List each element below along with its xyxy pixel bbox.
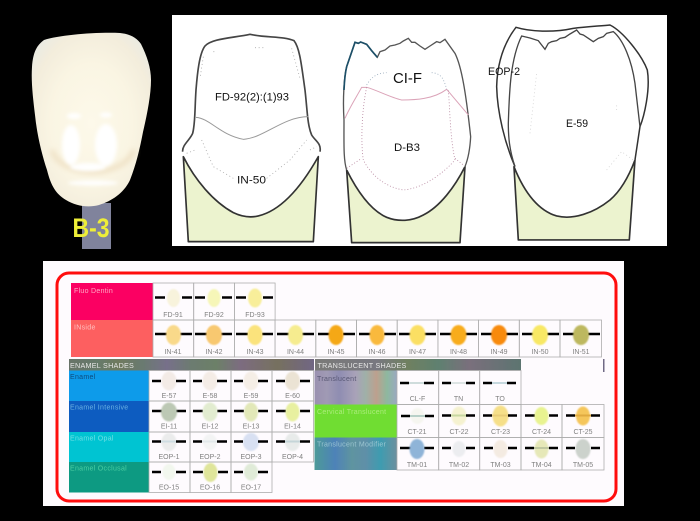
heading: Fluo Dentin [71,283,153,320]
swatch: CT-22 [439,404,480,438]
swatch: EO-16: EO-16 [200,484,220,492]
swatch: TM-05: TM-05 [573,462,593,469]
swatch: TM-01 [397,438,439,470]
label: EOP-2: EOP-2 [488,66,520,78]
swatch: EI-11 [149,401,190,432]
swatch: TN: TN [454,396,463,403]
crown shading band [52,150,134,172]
swatch: E-57: E-57 [162,393,176,400]
row: Fluo Dentin [71,283,275,320]
label: E-59: E-59 [566,118,588,130]
swatch: FD-91 [153,283,194,320]
crown body [32,33,151,206]
swatch: TM-03 [480,438,521,470]
heading: Enamel Opal: Enamel Opal [70,436,114,442]
heading: Enamel Occlusal [69,462,149,492]
swatch: EI-13: EI-13 [243,424,259,430]
swatch: CT-25: CT-25 [573,429,593,436]
label: B-3: B-3 [72,213,110,243]
swatch: IN-43: IN-43 [246,349,264,356]
swatch: E-58: E-58 [203,393,217,400]
swatch: IN-45 [316,320,356,357]
swatch: EI-12 [190,401,231,432]
swatch: TM-03: TM-03 [490,462,511,469]
heading: Cervical Translucent: Cervical Translucent [317,409,386,416]
row: Enamel Occlusal [69,462,272,492]
swatch: EO-15: EO-15 [159,484,179,492]
swatch: IN-41 [153,320,194,357]
swatch: EO-17 [231,462,272,492]
swatch: EOP-2 [190,432,231,462]
swatch: EOP-1 [149,432,190,462]
swatch: IN-51 [560,320,602,357]
heading: Enamel Intensive [69,401,149,432]
swatch: IN-47 [397,320,438,357]
heading: Translucent [314,370,397,404]
swatch: CT-21 [397,404,439,438]
swatch: EOP-3 [231,432,272,462]
heading: Translucent Modifier: Translucent Modifier [317,442,387,448]
swatch: IN-50 [519,320,560,357]
swatch: IN-44 [275,320,316,357]
heading: Translucent Shades: TRANSLUCENT SHADES [318,361,407,370]
swatch: IN-49 [479,320,519,357]
label: D-B3: D-B3 [394,142,420,154]
swatch: FD-92: FD-92 [204,312,224,319]
heading: Enamel Opal [69,432,149,462]
heading: Enamel: Enamel [70,374,96,381]
heading: INside: INside [74,324,96,332]
swatch: FD-91: FD-91 [163,312,183,319]
swatch: E-58 [190,370,231,401]
swatch: E-57 [149,370,190,401]
row: Translucent Modifier [314,438,604,470]
heading: Translucent Shades [315,359,521,370]
swatch: IN-47: IN-47 [409,349,426,356]
diagram: tooth 1 [183,34,320,242]
heading: Enamel [69,370,149,401]
swatch: EO-16 [190,462,231,492]
swatch: EOP-3: EOP-3 [240,454,262,461]
swatch: IN-42 [194,320,234,357]
diagram: tooth 3 [488,25,648,240]
panel: layering diagrams [172,15,667,246]
swatch: E-60 [272,370,314,401]
swatch: IN-41: IN-41 [164,349,182,356]
swatch: CT-24 [521,404,562,438]
swatch: TM-04: TM-04 [531,462,552,469]
swatch: EI-12: EI-12 [202,424,218,430]
swatch: EOP-1: EOP-1 [158,454,180,461]
swatch: FD-93: FD-93 [245,312,265,319]
swatch: IN-42: IN-42 [205,349,223,356]
icon: tooth stem [82,203,111,249]
swatch: CT-25 [562,404,604,438]
heading: INside [71,320,153,357]
swatch: FD-93 [234,283,275,320]
heading: Enamel Shades [69,359,314,370]
swatch: IN-46 [356,320,397,357]
swatch: TN [439,370,480,404]
swatch: IN-43 [234,320,275,357]
row: Enamel Opal [69,432,314,462]
panel: shade chart [43,261,624,506]
tooth photo: B-3 crown [32,33,151,249]
swatch: IN-51: IN-51 [572,349,590,356]
swatch: EOP-4: EOP-4 [282,454,303,461]
diagram: tooth 2 [343,38,471,243]
swatch: CL-F [397,370,439,404]
heading: Enamel Occlusal: Enamel Occlusal [70,466,127,472]
swatch: IN-48: IN-48 [450,349,467,356]
swatch: TM-02: TM-02 [449,462,469,469]
swatch: IN-50: IN-50 [531,349,549,356]
swatch: TM-04 [521,438,562,470]
swatch: TM-05 [562,438,604,470]
swatch: TM-02 [439,438,480,470]
red rounded border [57,273,616,501]
swatch: EO-17: EO-17 [241,484,261,492]
swatch: EO-15 [149,462,190,492]
swatch: EOP-4 [272,432,314,462]
row: Translucent [314,370,521,404]
swatch: CT-24: CT-24 [532,429,551,436]
swatch: E-59 [231,370,272,401]
swatch: TO [480,370,521,404]
crown highlights [62,112,118,186]
swatch: TM-01: TM-01 [407,462,427,469]
swatch: CT-22: CT-22 [449,429,469,436]
label: FD-92(2):(1)93: FD-92(2):(1)93 [215,92,289,104]
swatch: EOP-2: EOP-2 [199,454,221,461]
swatch: E-59: E-59 [244,393,258,400]
swatch: IN-46: IN-46 [368,349,386,356]
heading: Cervical Translucent [314,404,397,438]
row: Enamel Intensive [69,401,314,432]
swatch: CT-21: CT-21 [407,429,427,436]
heading: Translucent Modifier [314,438,397,470]
swatch: EI-14: EI-14 [284,424,301,430]
swatch: IN-44: IN-44 [287,349,304,356]
swatch: IN-45: IN-45 [327,349,345,356]
swatch: E-60: E-60 [285,393,300,400]
swatch: CT-23 [480,404,521,438]
label: CI-F: CI-F [393,70,422,87]
swatch: EI-11: EI-11 [161,424,177,430]
heading: Enamel Intensive: Enamel Intensive [70,404,128,412]
swatch: IN-49: IN-49 [490,349,508,356]
swatch: EI-14 [272,401,314,432]
row: Cervical Translucent [314,404,604,438]
row: Inside [71,320,602,357]
heading: Fluo Dentin: Fluo Dentin [74,288,113,295]
swatch: CT-23: CT-23 [491,429,510,436]
swatch: TO: TO [495,396,505,403]
swatch: CL-F: CL-F [410,396,425,403]
label: IN-50: IN-50 [237,175,266,187]
swatch: FD-92 [194,283,234,320]
heading: Translucent: Translucent [317,376,357,383]
heading: Enamel Shades: ENAMEL SHADES [70,361,134,370]
swatch: EI-13 [231,401,272,432]
swatch: IN-48 [438,320,479,357]
row: Enamel [69,370,314,401]
